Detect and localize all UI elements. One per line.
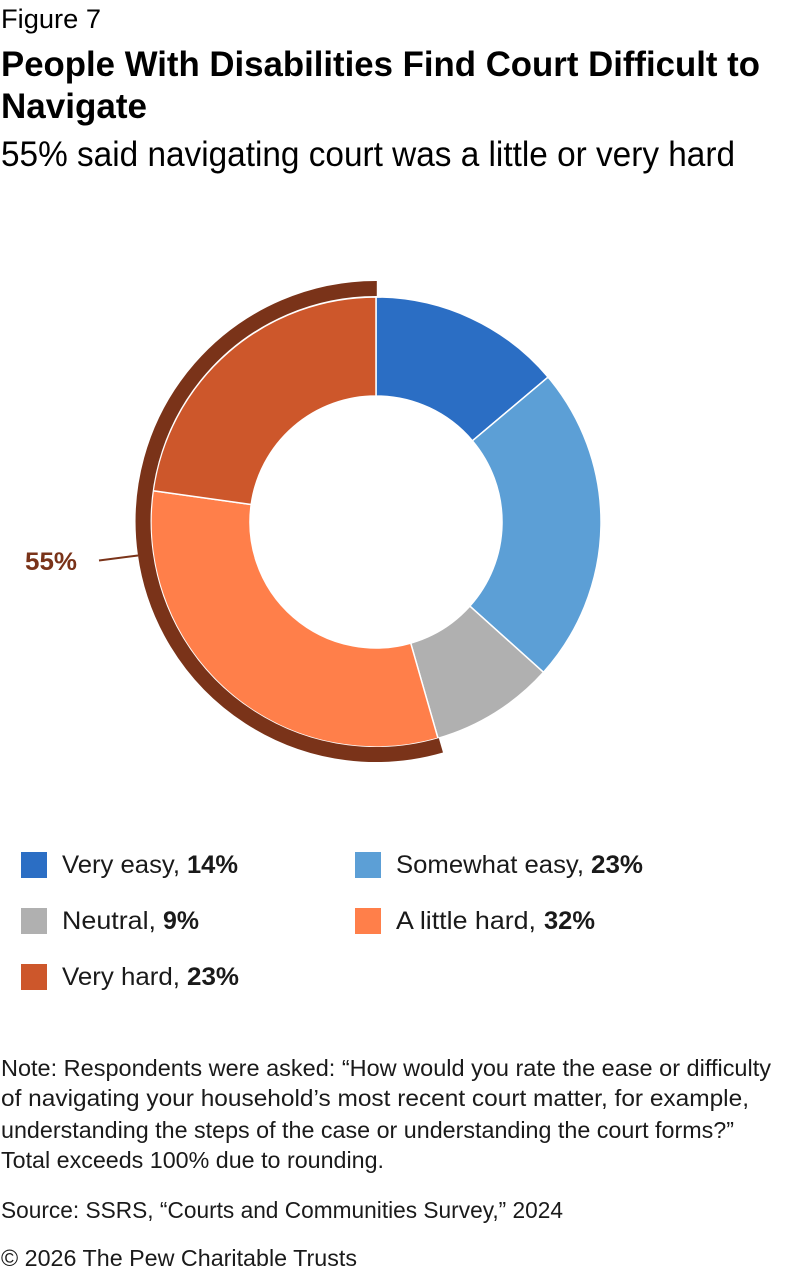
- legend item: very easy: 14%: [187, 851, 238, 879]
- legend item: a little hard: [355, 907, 595, 935]
- callout: 55%: [25, 548, 138, 576]
- legend item: a little hard: A little hard,: [396, 907, 536, 935]
- legend item: very easy: Very easy,: [62, 851, 180, 879]
- legend item: neutral: [21, 907, 199, 935]
- callout: 55%: 55%: [25, 548, 77, 576]
- legend item: neutral: Neutral,: [62, 907, 156, 935]
- note: Note: Respondents were asked: “How would you rate the ease or difficulty: [1, 1055, 771, 1081]
- legend item: very hard: Very hard,: [62, 963, 180, 991]
- segment: a little hard 32%: [151, 491, 438, 747]
- legend item: somewhat easy: Somewhat easy,: [396, 851, 584, 879]
- note: of navigating your household’s most recent court matter, for example,: [1, 1085, 749, 1111]
- subtitle: 55% said navigating court was a little or very hard: [1, 134, 735, 174]
- source: Source: SSRS, “Courts and Communities Survey,” 2024: [1, 1197, 563, 1223]
- segment: very hard 23%: [153, 297, 376, 504]
- copyright: © 2026 The Pew Charitable Trusts: [1, 1245, 357, 1271]
- title: People With Disabilities Find Court Difficult to: [1, 44, 760, 84]
- note: understanding the steps of the case or understanding the court forms?”: [1, 1117, 734, 1143]
- segment: neutral 9%: [411, 606, 544, 738]
- legend item: very easy: [21, 851, 238, 879]
- segment: somewhat easy 23%: [470, 377, 601, 672]
- legend item: somewhat easy: [355, 851, 643, 879]
- legend item: neutral: 9%: [163, 907, 199, 935]
- note: [1, 1055, 771, 1173]
- legend: [21, 851, 643, 991]
- legend item: very hard: 23%: [187, 963, 239, 991]
- legend item: a little hard: 32%: [544, 907, 595, 935]
- title: [1, 44, 760, 126]
- figure label: Figure 7: [1, 4, 101, 34]
- bracket arc: 55% hard: [143, 288, 441, 754]
- donut chart: [143, 288, 601, 754]
- title: Navigate: [1, 86, 147, 126]
- segment: very easy 14%: [376, 297, 548, 441]
- legend item: very hard: [21, 963, 239, 991]
- legend item: somewhat easy: 23%: [591, 851, 643, 879]
- note: Total exceeds 100% due to rounding.: [1, 1147, 384, 1173]
